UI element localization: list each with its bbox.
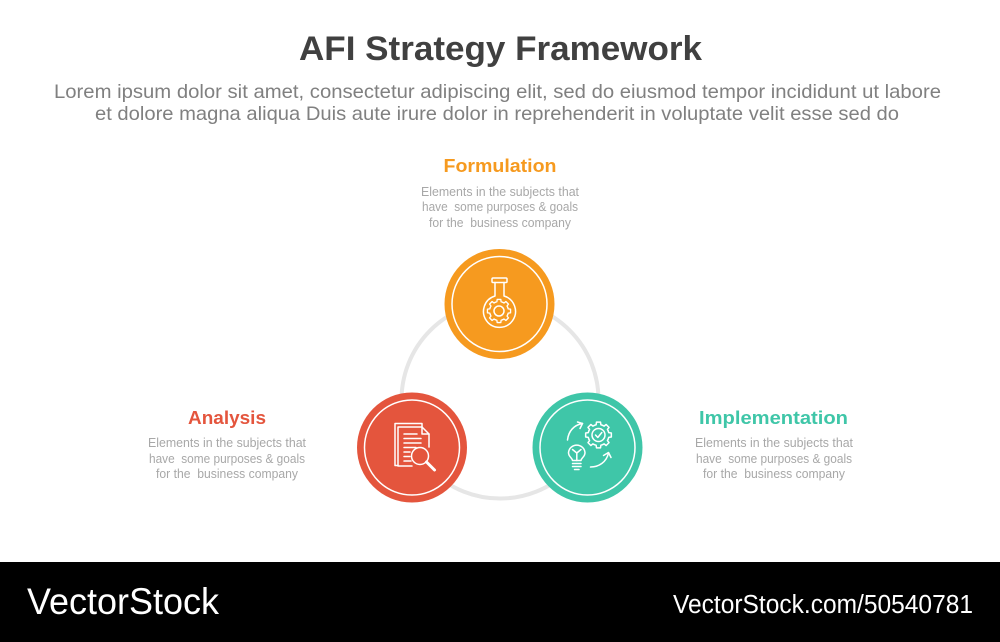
description: formulation: have some purposes & goals bbox=[422, 200, 578, 214]
subtitle text: et dolore magna aliqua Duis aute irure dolor in reprehenderit in voluptate velit esse sed do bbox=[95, 103, 899, 125]
panel: analysis text bbox=[148, 408, 307, 481]
node: implementation circle bbox=[532, 392, 642, 502]
description: implementation bbox=[695, 436, 854, 481]
node: formulation circle bbox=[444, 249, 554, 359]
connecting ring bbox=[402, 302, 598, 498]
description: analysis bbox=[148, 436, 307, 481]
icon: flask with gear bbox=[484, 278, 516, 327]
description: formulation: for the business company bbox=[429, 216, 572, 230]
stock url: VectorStock.com/50540781 bbox=[673, 591, 973, 619]
icon: documents with magnifier bbox=[395, 424, 434, 470]
description: implementation: have some purposes & goals bbox=[696, 452, 852, 466]
subtitle text: Lorem ipsum dolor sit amet, consectetur adipiscing elit, sed do eiusmod tempor incididunt ut labore bbox=[54, 81, 941, 103]
heading: analysis: Analysis bbox=[188, 408, 266, 428]
description: implementation: Elements in the subjects that bbox=[695, 436, 854, 450]
title: AFI Strategy Framework bbox=[299, 30, 702, 68]
description: analysis: have some purposes & goals bbox=[149, 452, 305, 466]
description: analysis: Elements in the subjects that bbox=[148, 436, 307, 450]
panel: formulation text bbox=[421, 156, 580, 230]
brand name: VectorStock bbox=[27, 581, 219, 622]
icon: gear, light bulb and arrows bbox=[568, 422, 611, 470]
description: formulation: Elements in the subjects that bbox=[421, 185, 580, 199]
description: analysis: for the business company bbox=[156, 467, 299, 481]
description: formulation bbox=[421, 185, 580, 230]
description: implementation: for the business company bbox=[703, 467, 846, 481]
watermark band bbox=[0, 562, 1000, 642]
panel: implementation text bbox=[695, 408, 854, 481]
heading: formulation: Formulation bbox=[444, 156, 556, 176]
node: analysis circle bbox=[357, 392, 467, 502]
heading: implementation: Implementation bbox=[699, 408, 848, 428]
subtitle text bbox=[54, 81, 941, 125]
